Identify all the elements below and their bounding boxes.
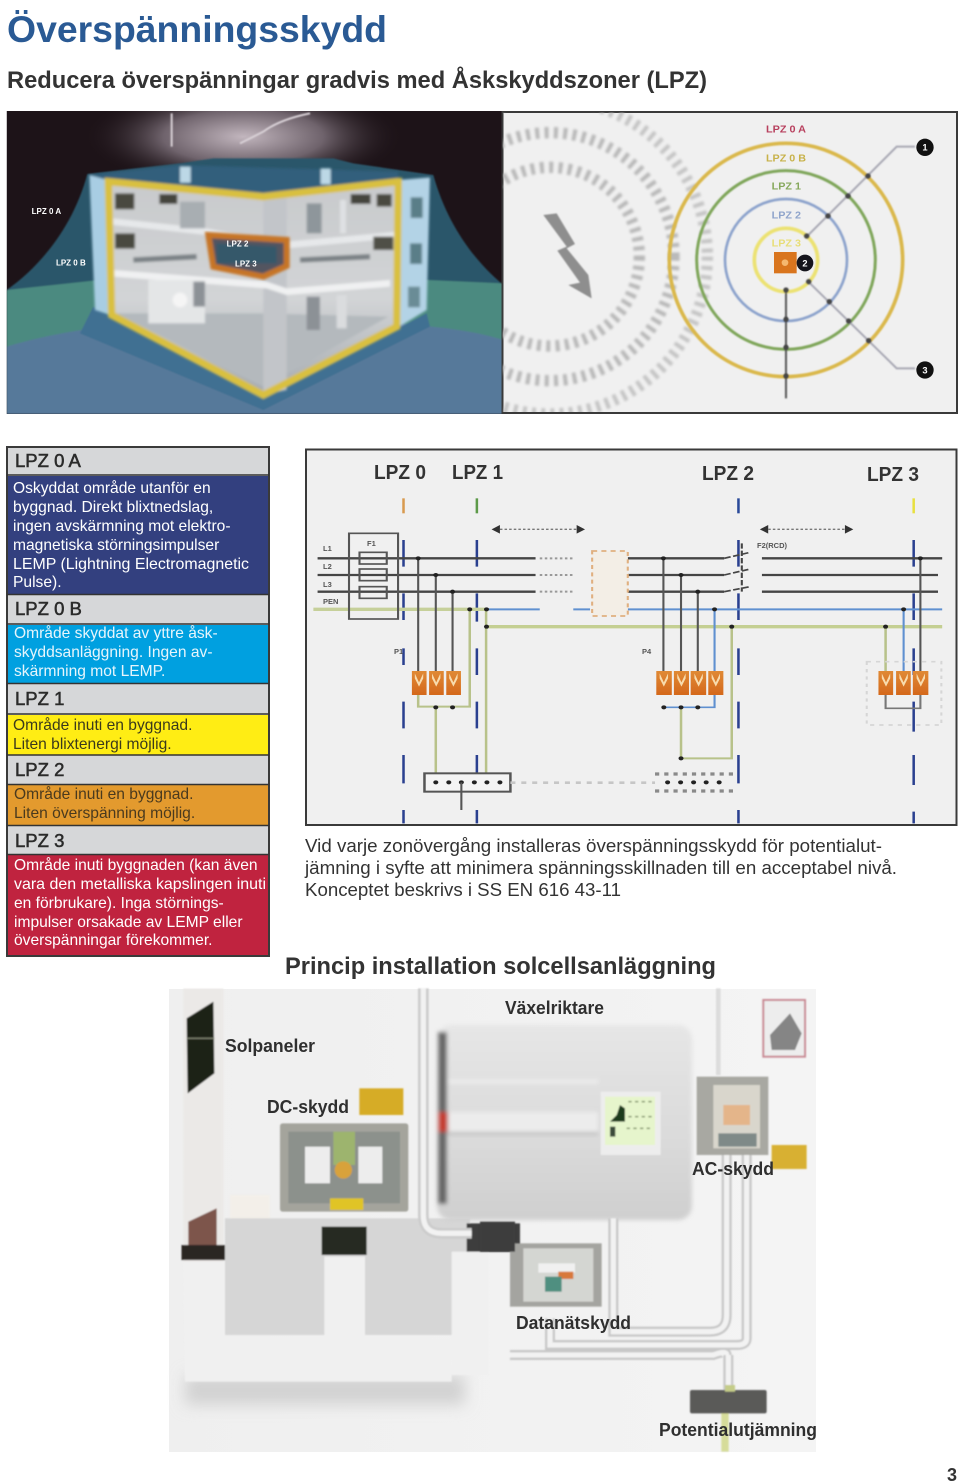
conductor labels: F2(RCD) bbox=[757, 541, 787, 550]
main fuse box bbox=[349, 533, 398, 619]
data surge box bbox=[510, 1243, 602, 1307]
zone LPZ 2: Liten överspänning möjlig. bbox=[14, 805, 195, 822]
text block: zone transition explanation: Konceptet beskrivs i SS EN 616 43-11 bbox=[305, 879, 621, 900]
storm clouds bbox=[108, 111, 378, 166]
text block: zone transition explanation: Vid varje zonövergång installeras överspänningsskydd för potentialut- bbox=[305, 835, 882, 856]
zone LPZ 2: LPZ 2 bbox=[15, 759, 64, 780]
PV warning sign bbox=[763, 1000, 805, 1057]
conductor labels: P4 bbox=[642, 647, 652, 656]
cable duct recess bbox=[225, 1218, 470, 1335]
main earthing busbar bbox=[424, 773, 510, 792]
zone LPZ 0 A: Oskyddat område utanför en bbox=[13, 479, 211, 497]
zone LPZ 0 A: ingen avskärmning mot elektro- bbox=[13, 518, 231, 535]
text block: zone transition explanation bbox=[304, 835, 897, 900]
zone labels on building: LPZ 2 bbox=[227, 240, 249, 249]
dotted equipment box bbox=[592, 551, 628, 616]
conductor labels bbox=[323, 539, 787, 656]
zone LPZ 3: vara den metalliska kapslingen inuti bbox=[14, 876, 266, 893]
zone LPZ 0 A bbox=[7, 450, 269, 594]
icon: lightning bolt bbox=[543, 213, 592, 298]
zone labels on rings: LPZ 3 bbox=[772, 239, 801, 250]
zone LPZ 0 B: skärmning mot LEMP. bbox=[14, 663, 165, 680]
panel: LPZ zone legend bbox=[7, 447, 269, 956]
pipes bbox=[510, 1155, 747, 1392]
zone LPZ 0 A: LPZ 0 A bbox=[15, 450, 81, 471]
illustration: solar installation photo bbox=[169, 988, 817, 1452]
drop conductors bbox=[418, 558, 920, 672]
zone LPZ 0 B: LPZ 0 B bbox=[15, 598, 82, 619]
conductor labels: L3 bbox=[323, 580, 332, 589]
zone boundary dashes bbox=[404, 498, 914, 823]
zone column headings: LPZ 2 bbox=[702, 463, 754, 485]
zone labels on rings: LPZ 2 bbox=[772, 211, 801, 222]
surge protection devices bbox=[412, 671, 928, 695]
zone LPZ 0 B bbox=[7, 598, 269, 684]
zone column headings: LPZ 0 bbox=[374, 462, 426, 484]
solar installation labels: AC-skydd bbox=[692, 1159, 774, 1179]
earthing bar bbox=[714, 1412, 736, 1452]
solar installation labels: Datanätskydd bbox=[516, 1313, 631, 1333]
solar installation labels: Potentialutjämning bbox=[659, 1420, 817, 1440]
zone LPZ 1 bbox=[7, 688, 269, 755]
wall strip and solar panel bbox=[183, 988, 223, 1262]
conductor labels: P1 bbox=[394, 647, 403, 656]
solar installation labels: Växelriktare bbox=[505, 998, 604, 1018]
heading: solar installation: Princip installation solcellsanläggning bbox=[285, 953, 716, 980]
zone LPZ 1: Område inuti en byggnad. bbox=[13, 716, 192, 734]
zone LPZ 3 bbox=[7, 830, 269, 955]
inverter housing bbox=[437, 1025, 692, 1220]
subtitle: Reducera överspänningar gradvis med Åskskyddszoner (LPZ) bbox=[7, 66, 707, 94]
zone labels on rings: LPZ 0 B bbox=[766, 153, 806, 164]
orange equipment square bbox=[774, 252, 797, 273]
solar installation labels: Solpaneler bbox=[225, 1036, 315, 1056]
soft shadow beneath cable channel bbox=[185, 1375, 465, 1405]
zone LPZ 2: Område inuti en byggnad. bbox=[14, 785, 193, 803]
solar installation labels bbox=[225, 998, 817, 1440]
zone LPZ 1: LPZ 1 bbox=[15, 688, 64, 709]
title: Överspänningsskydd bbox=[7, 8, 387, 50]
dotted SPD enclosure bbox=[867, 662, 941, 725]
conductor labels: L2 bbox=[323, 562, 332, 571]
zone LPZ 3: LPZ 3 bbox=[15, 830, 64, 851]
conductor labels: L1 bbox=[323, 544, 332, 553]
solar installation labels: DC-skydd bbox=[267, 1097, 349, 1117]
zone labels on rings: LPZ 0 A bbox=[766, 124, 806, 135]
conductor labels: F1 bbox=[367, 539, 376, 548]
zone LPZ 0 B: skyddsanläggning. Ingen av- bbox=[14, 644, 213, 661]
phase conductors bbox=[318, 558, 942, 592]
secondary earthing bar bbox=[655, 774, 737, 791]
zone column headings: LPZ 1 bbox=[452, 462, 503, 484]
diagram: concentric lightning protection zones bbox=[502, 111, 958, 414]
zone LPZ 3: impulser orsakade av LEMP eller bbox=[14, 914, 243, 931]
zone labels on building: LPZ 0 A bbox=[32, 207, 61, 216]
junction dots bbox=[416, 556, 923, 760]
AC surge box bbox=[697, 1077, 768, 1155]
zone LPZ 3: Område inuti byggnaden (kan även bbox=[14, 856, 258, 874]
zone LPZ 2 bbox=[7, 759, 269, 826]
pipe bbox=[423, 988, 472, 1233]
zone LPZ 3: överspänningar förekommer. bbox=[14, 932, 212, 949]
zone column headings: LPZ 3 bbox=[867, 464, 919, 486]
zone LPZ 0 A: LEMP (Lightning Electromagnetic bbox=[13, 556, 249, 573]
zone labels on building: LPZ 3 bbox=[235, 260, 257, 269]
distance arrows bbox=[492, 525, 853, 534]
zone column headings bbox=[374, 462, 919, 486]
PEN, neutral and earth conductors bbox=[313, 604, 485, 614]
zone labels on rings bbox=[766, 124, 806, 250]
yellow warning tag bbox=[359, 1088, 403, 1115]
zone LPZ 0 A: byggnad. Direkt blixtnedslag, bbox=[13, 499, 213, 516]
illustration: building cutaway with lightning protection zones bbox=[7, 83, 503, 414]
zone LPZ 1: Liten blixtenergi möjlig. bbox=[13, 736, 172, 753]
zone labels on building bbox=[32, 207, 257, 269]
text block: zone transition explanation: jämning i syfte att minimera spänningsskillnaden till en acceptabel nivå. bbox=[304, 857, 897, 878]
zone LPZ 0 B: Område skyddat av yttre åsk- bbox=[14, 624, 218, 642]
numbered markers: 1 bbox=[922, 143, 928, 153]
conductor labels: PEN bbox=[323, 597, 338, 606]
zone LPZ 3: en förbrukare). Inga störnings- bbox=[14, 895, 224, 912]
chart: wiring schematic across zones bbox=[306, 450, 956, 825]
zone LPZ 0 A: magnetiska störningsimpulser bbox=[13, 537, 219, 554]
zone labels on building: LPZ 0 B bbox=[56, 258, 86, 267]
numbered markers bbox=[797, 139, 934, 379]
numbered markers: 3 bbox=[922, 365, 928, 375]
electromagnetic wave rings bbox=[502, 112, 714, 412]
zone labels on rings: LPZ 1 bbox=[772, 181, 801, 192]
numbered markers: 2 bbox=[802, 258, 808, 268]
DC surge box bbox=[280, 1123, 408, 1212]
zone LPZ 0 A: Pulse). bbox=[13, 574, 62, 591]
RCD switch bbox=[724, 543, 750, 592]
inverter display bbox=[601, 1092, 661, 1155]
